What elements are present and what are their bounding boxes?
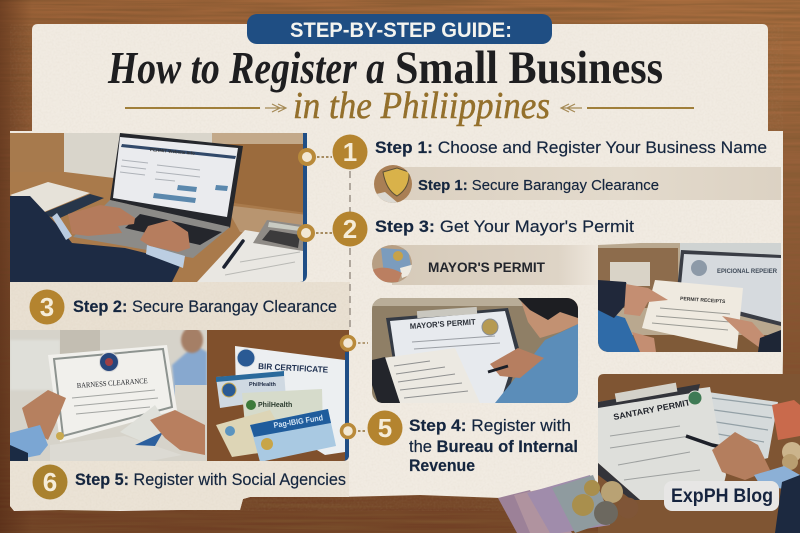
coins <box>572 480 638 525</box>
Pag-IBIG card: Pag-IBIG Fund <box>273 413 324 430</box>
photo accent: lower blue edge <box>342 352 349 461</box>
photo accent: blue edge <box>300 133 307 282</box>
PhilHealth card <box>242 389 322 420</box>
photo: hands typing on laptop <box>10 133 307 282</box>
hands holding certificate <box>10 390 205 461</box>
suit sleeves and hands <box>10 196 190 282</box>
beige card <box>216 410 276 457</box>
ID card: PhilHealth <box>249 382 277 388</box>
second papers <box>708 392 800 470</box>
title: Small Business <box>395 42 663 94</box>
permit certificate: PERMIT RECEIPTS <box>680 296 726 305</box>
hand with pen <box>686 432 800 533</box>
band: step 2 secure barangay clearance: Step 2: Secure Barangay Clearance <box>73 298 337 316</box>
badge: ExpPH Blog <box>664 481 779 511</box>
laptop <box>73 133 243 258</box>
paper, pen and calculator <box>197 220 307 282</box>
barangay clearance certificate <box>48 345 177 442</box>
clipboard with permit: MAYOR'S PERMIT <box>410 317 476 331</box>
number badge 6 <box>32 464 68 500</box>
connector ring: photo 1 top <box>300 150 332 164</box>
barangay clearance certificate: BARNESS CLEARANCE <box>77 376 148 390</box>
heading badge: step-by-step guide: STEP-BY-STEP GUIDE: <box>290 19 512 42</box>
title <box>107 42 663 94</box>
step 4: register with BIR: Revenue <box>409 457 475 475</box>
step 1 heading: Step 1: Choose and Register Your Business Name <box>375 138 767 157</box>
photo: filling out mayor's permit <box>372 298 578 403</box>
number badge 3 <box>30 290 64 324</box>
strip: mayor's permit: MAYOR'S PERMIT <box>428 260 546 275</box>
connector ring: photo 1 lower <box>299 226 332 240</box>
money: banknotes and coins <box>498 475 638 533</box>
permit certificate <box>642 280 743 349</box>
icon: permit booklet in hand <box>372 245 412 283</box>
band: step 2 secure barangay clearance <box>30 290 337 324</box>
PhilHealth card: PhilHealth <box>258 402 292 409</box>
icon: gold shield <box>372 165 414 203</box>
band: step 5 register with social agencies <box>32 464 346 500</box>
laptop behind <box>676 250 781 326</box>
BIR certificate: BIR CERTIFICATE <box>258 361 329 375</box>
man in blue shirt <box>488 298 578 403</box>
number badge 2 <box>332 212 368 246</box>
number badge 1: 1 <box>343 137 357 167</box>
hands <box>624 284 781 352</box>
clipboard with permit <box>386 307 520 403</box>
connector ring: photo 2 lower <box>342 424 367 438</box>
subtitle with ornaments: in the Philiippines <box>293 85 550 127</box>
number badge 6: 6 <box>43 467 57 497</box>
timeline dashes <box>349 171 351 330</box>
BIR certificate <box>235 346 345 455</box>
band: step 5 register with social agencies: Step 5: Register with Social Agencies <box>75 471 346 489</box>
papers and notebook on desk <box>10 182 104 218</box>
strip: barangay clearance: Step 1: Secure Barangay Clearance <box>418 178 659 194</box>
number badge 5: 5 <box>378 413 392 443</box>
photo: barangay clearance and agency cards <box>10 327 349 462</box>
photo: sanitary permit on desk <box>598 374 800 533</box>
strip: mayor's permit <box>372 245 600 285</box>
photo: handing over official permit <box>598 243 781 352</box>
laptop behind: EPICIONAL REPEIER <box>717 268 777 275</box>
form on top <box>383 348 480 403</box>
subtitle with ornaments <box>125 85 694 127</box>
number badge 2: 2 <box>343 214 357 244</box>
heading badge: step-by-step guide <box>247 14 552 44</box>
step 4: register with BIR: Step 4: Register with <box>409 417 571 435</box>
step 3 heading: Step 3: Get Your Mayor's Permit <box>375 217 634 236</box>
laptop: PERMIT Website Info <box>150 147 195 156</box>
title: How to Register a <box>107 42 385 93</box>
clipboard with permit <box>598 383 726 500</box>
badge: ExpPH Blog: ExpPH Blog <box>671 486 773 507</box>
strip: barangay clearance <box>372 165 781 203</box>
number badge 1 <box>332 134 368 170</box>
ID card <box>216 371 286 408</box>
Pag-IBIG card <box>250 409 336 462</box>
number badge 5 <box>368 410 402 446</box>
clipboard with permit: SANTARY PERMIT <box>612 397 692 422</box>
step 4: register with BIR: the Bureau of Internal <box>409 438 578 456</box>
step 4: register with BIR <box>368 410 578 475</box>
number badge 3: 3 <box>40 292 54 322</box>
connector ring: photo 2 top <box>342 336 368 350</box>
